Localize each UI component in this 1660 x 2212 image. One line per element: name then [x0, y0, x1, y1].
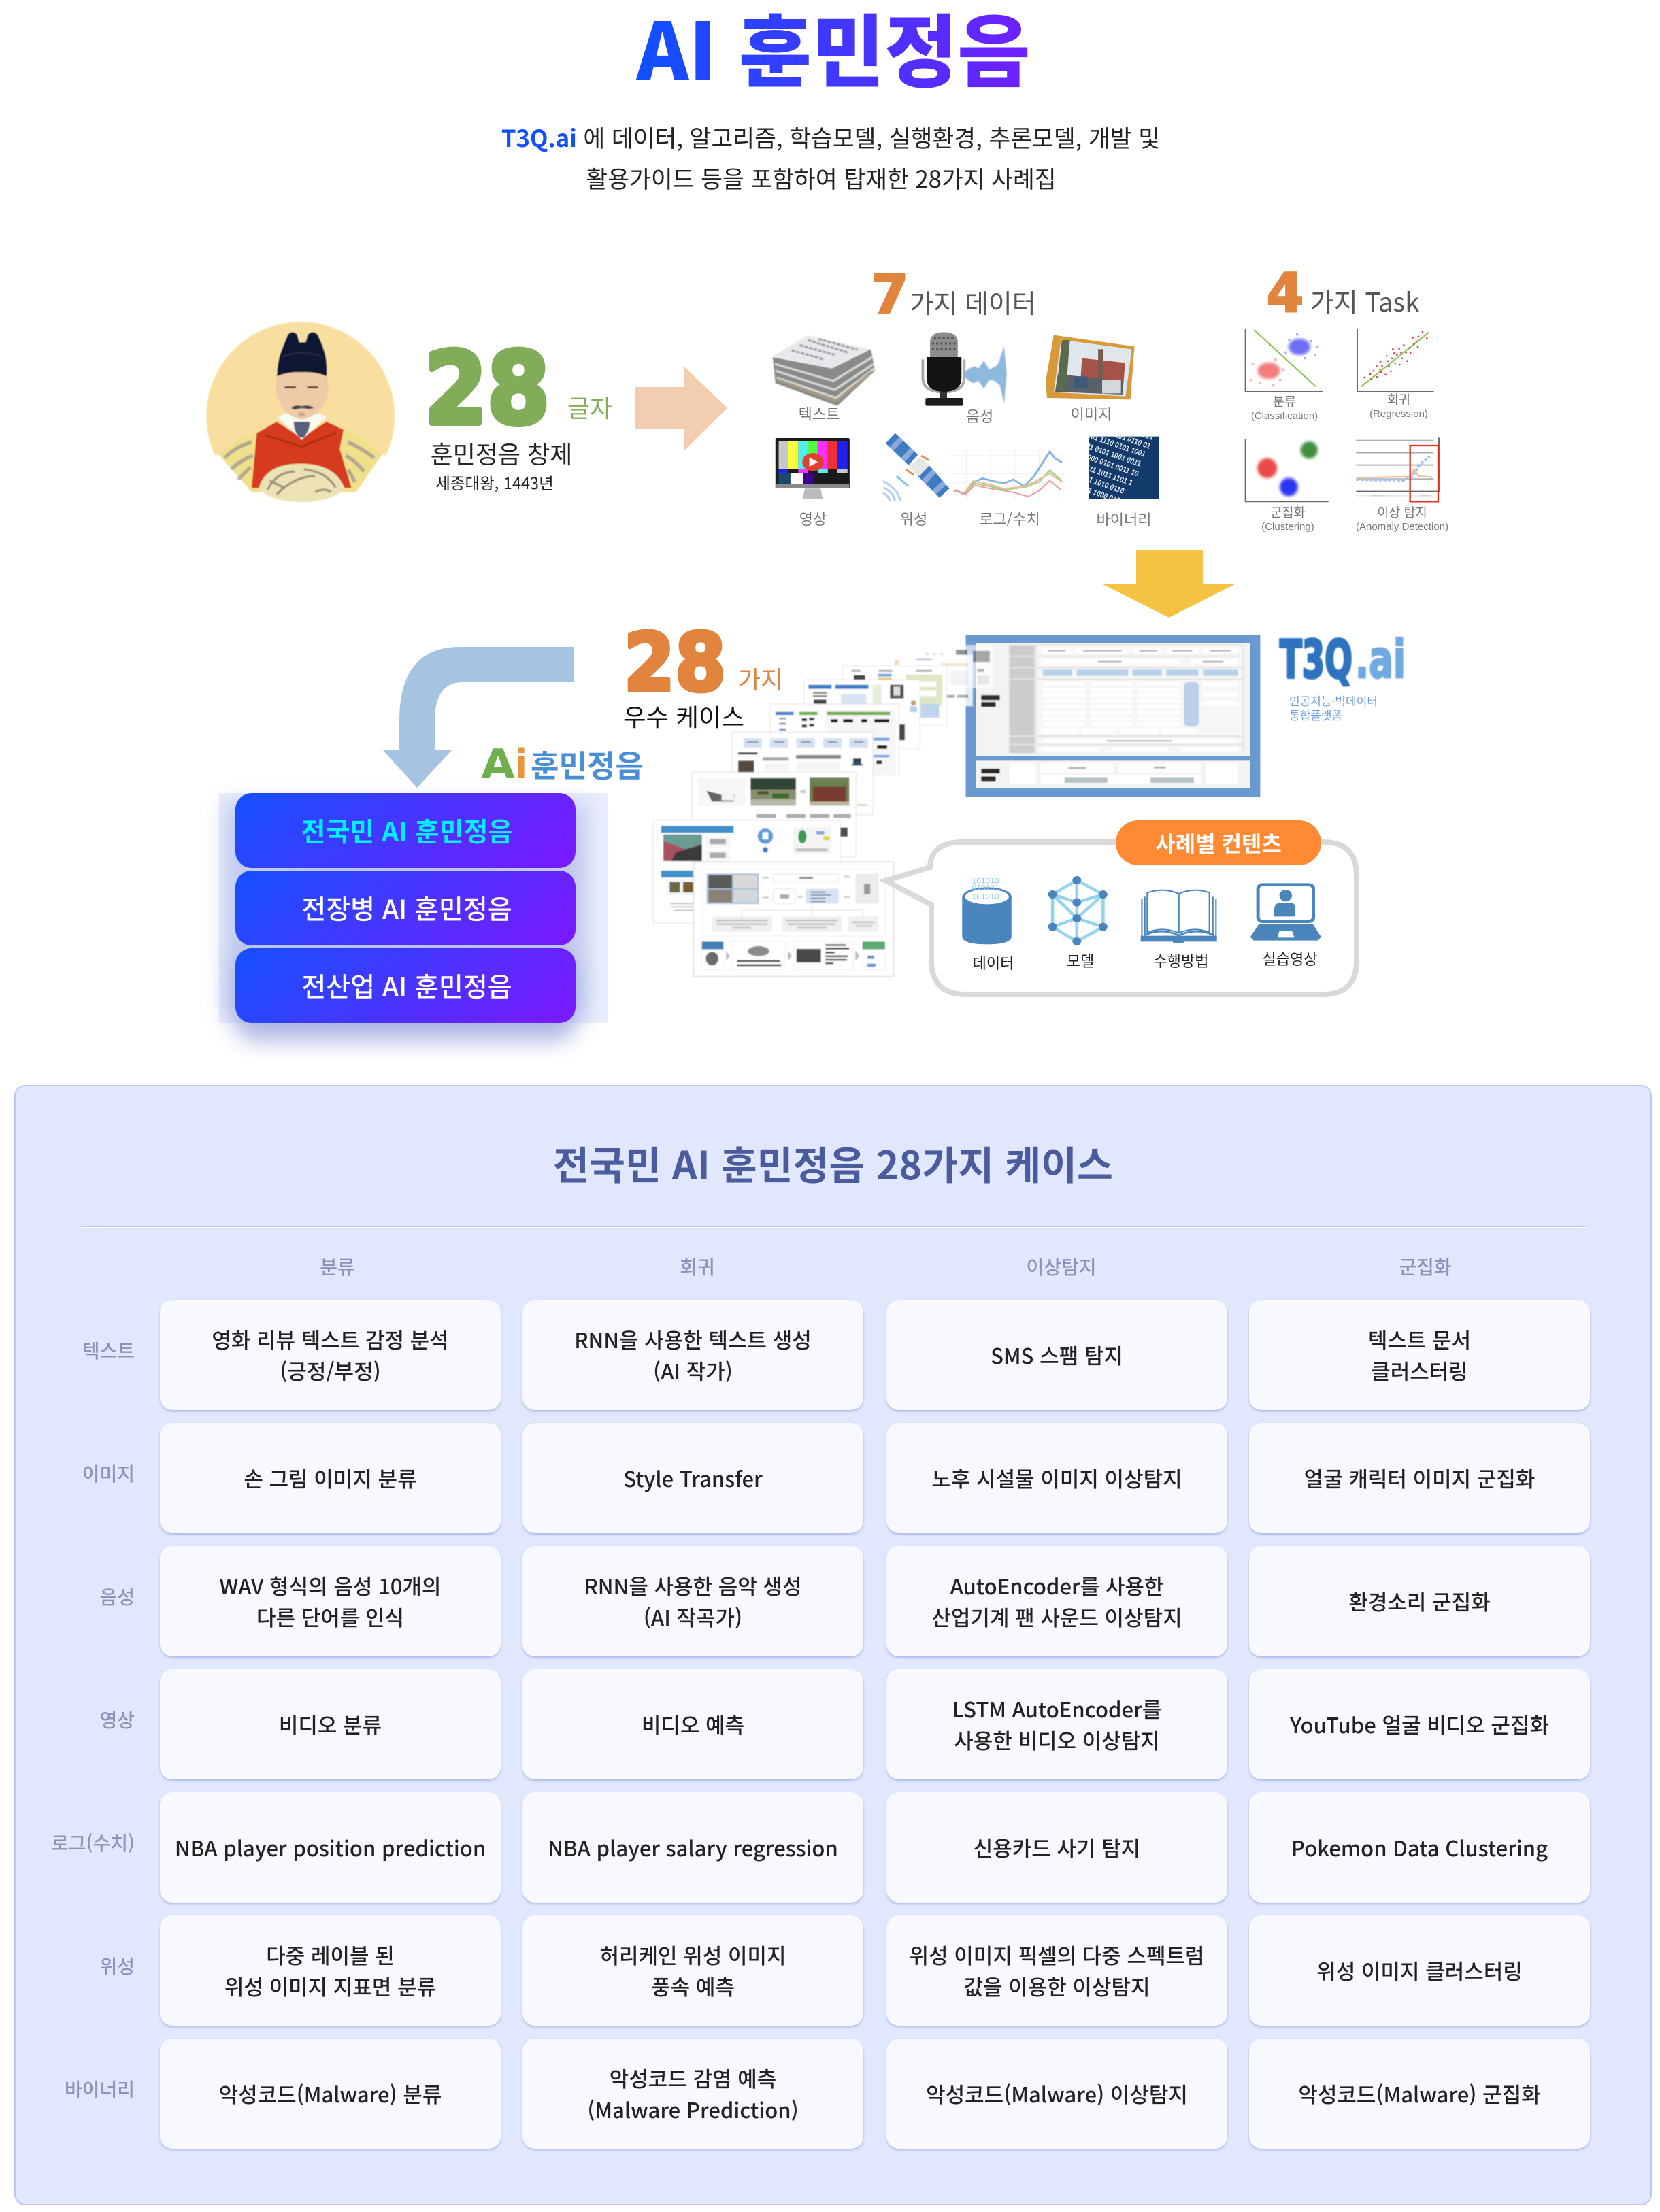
subtitle: 활용가이드 등을 포함하여 탑재한 28가지 사례집 — [586, 161, 1057, 195]
row label: text: 텍스트 — [82, 1337, 135, 1364]
label: clustering: 군집화 — [1270, 503, 1306, 521]
column header: regression: 회귀 — [680, 1253, 715, 1280]
column header: classification: 분류 — [320, 1253, 355, 1280]
card — [522, 1423, 863, 1533]
media type icons — [773, 332, 1159, 507]
icon: binary: 11 1011 1101 0110 01 — [1086, 422, 1152, 451]
logo: T3Q.ai: T3Q — [1280, 630, 1352, 690]
card: 산업기계 팬 사운드 이상탐지 — [931, 1601, 1182, 1632]
badge: contents by case — [1116, 820, 1321, 865]
logo: AI Hunminjeongeum — [481, 741, 644, 788]
icon: newspapers text — [773, 335, 875, 406]
logo tagline: 인공지능·빅데이터 — [1289, 692, 1378, 709]
card: 값을 이용한 이상탐지 — [963, 1971, 1150, 2001]
sheet 7 — [842, 665, 947, 726]
card: 다중 레이블 된 — [266, 1939, 395, 1970]
card — [522, 1546, 863, 1656]
label: text: 텍스트 — [799, 403, 840, 424]
task charts — [1246, 329, 1439, 501]
card — [886, 1915, 1227, 2026]
panel heading: 전국민 AI 훈민정음 28가지 케이스 — [553, 1134, 1113, 1191]
label: cases unit: 가지 — [738, 660, 783, 696]
panel: 28 cases — [14, 1085, 1652, 2205]
sheet 3 — [692, 773, 856, 857]
label: audio: 음성 — [966, 405, 993, 426]
button: AI for soldiers — [235, 871, 576, 945]
card: 환경소리 군집화 — [1348, 1586, 1491, 1616]
callout icons — [962, 876, 1321, 945]
card — [886, 2039, 1227, 2149]
badge: contents by case: 사례별 컨텐츠 — [1155, 827, 1282, 858]
sheet 2 — [654, 820, 840, 924]
label: data: 데이터 — [973, 952, 1014, 973]
card — [886, 1546, 1227, 1656]
label: classification: 분류 — [1273, 392, 1296, 410]
column header: clustering: 군집화 — [1399, 1253, 1452, 1280]
icon: database: 101010 — [972, 892, 999, 901]
arrow: blue curved down-left — [383, 647, 574, 788]
card — [160, 2039, 501, 2149]
card — [1249, 1546, 1590, 1656]
logo: T3Q.ai: .ai — [1355, 630, 1406, 690]
sheet 4 — [733, 733, 873, 815]
icon: database: 101010 — [972, 877, 999, 885]
card — [160, 1915, 501, 2026]
card — [160, 1792, 501, 1903]
button: AI for all industries: 전산업 AI 훈민정음 — [301, 967, 512, 1005]
card — [160, 1546, 501, 1656]
card: 풍속 예측 — [651, 1971, 735, 2001]
icon: binary: 1010 1001 1110 0101 — [1090, 414, 1155, 442]
heading: 4 tasks: 4 — [1267, 263, 1304, 324]
card — [522, 1300, 863, 1410]
row label: video: 영상 — [99, 1706, 135, 1733]
label: method: 수행방법 — [1154, 950, 1208, 971]
logo tagline — [1289, 692, 1378, 723]
heading: 4 tasks — [1267, 263, 1419, 324]
number: 28 letters: 28 — [425, 331, 550, 447]
card — [1249, 1792, 1590, 1903]
chart: clustering scatter — [1246, 439, 1329, 501]
label: image: 이미지 — [1071, 403, 1112, 424]
card: 악성코드(Malware) 군집화 — [1298, 2078, 1541, 2109]
card: 손 그림 이미지 분류 — [244, 1462, 417, 1493]
subtitle — [501, 120, 1160, 195]
sheet 1 — [693, 862, 893, 977]
heading: excellent cases: 우수 케이스 — [623, 698, 744, 734]
card: 위성 이미지 지표면 분류 — [225, 1971, 436, 2001]
icon: binary: 0001 1110 0101 1001 — [1082, 430, 1147, 459]
card: Style Transfer — [623, 1462, 763, 1493]
icon: binary — [1089, 437, 1159, 499]
icon: photo image — [1046, 335, 1134, 399]
callout: contents by case — [886, 820, 1357, 994]
button: AI for all citizens: 전국민 AI 훈민정음 — [301, 811, 512, 850]
card: 악성코드(Malware) 분류 — [219, 2078, 442, 2109]
card: 비디오 예측 — [642, 1709, 744, 1739]
case sheet stack — [654, 645, 993, 977]
heading: 7 data types — [872, 265, 1036, 326]
icon: binary: 101 0101 1010 0110 — [1064, 468, 1126, 496]
card — [886, 1792, 1227, 1903]
card: 비디오 분류 — [279, 1709, 382, 1739]
label: regression: 회귀 — [1387, 390, 1410, 408]
logo: AI Hunminjeongeum: 훈민정음 — [531, 741, 644, 786]
arrow: peach right — [635, 367, 727, 450]
logo tagline: 통합플랫폼 — [1289, 706, 1342, 723]
icon: binary: 1101 0101 1001 0011 — [1078, 439, 1142, 469]
card: 노후 시설물 이미지 이상탐지 — [931, 1462, 1182, 1493]
card: WAV 형식의 음성 10개의 — [220, 1570, 441, 1601]
platform architecture diagram — [966, 635, 1260, 797]
icon: video monitor — [776, 438, 850, 499]
card: YouTube 얼굴 비디오 군집화 — [1290, 1709, 1549, 1739]
heading: Hunminjeongeum creation: 훈민정음 창제 — [431, 435, 572, 471]
sheet 8 — [884, 655, 973, 706]
card: 얼굴 캐릭터 이미지 군집화 — [1304, 1462, 1535, 1493]
card: (긍정/부정) — [280, 1355, 381, 1386]
icon: binary: 101 1111 1011 1101 1 — [1069, 458, 1134, 488]
row label: audio: 음성 — [99, 1583, 135, 1610]
card — [1249, 1423, 1590, 1533]
card: (Malware Prediction) — [587, 2094, 799, 2124]
card — [522, 1915, 863, 2026]
icon: microphone audio — [923, 332, 1007, 406]
card — [886, 1669, 1227, 1779]
card: NBA player position prediction — [175, 1832, 486, 1862]
icon: log line chart — [948, 449, 1066, 500]
card: 영화 리뷰 텍스트 감정 분석 — [212, 1324, 449, 1354]
label: model: 모델 — [1067, 950, 1094, 971]
label: video: 영상 — [799, 507, 827, 529]
row label: satellite: 위성 — [99, 1952, 135, 1979]
card — [1249, 1669, 1590, 1779]
heading: 7 data types: 가지 데이터 — [910, 283, 1036, 320]
sheet 9 — [917, 645, 993, 688]
card: 허리케인 위성 이미지 — [599, 1939, 786, 1970]
card: SMS 스팸 탐지 — [991, 1339, 1123, 1370]
infographic flow diagram — [205, 0, 1448, 1054]
card — [522, 2039, 863, 2149]
card: 클러스터링 — [1371, 1355, 1468, 1386]
label: Anomaly Detection english: (Anomaly Detection) — [1356, 521, 1448, 533]
card — [522, 1792, 863, 1903]
label: Regression english: (Regression) — [1370, 408, 1428, 420]
card — [1249, 2039, 1590, 2149]
card: 텍스트 문서 — [1368, 1324, 1471, 1354]
button: AI for all citizens — [235, 793, 576, 868]
card — [160, 1423, 501, 1533]
card: LSTM AutoEncoder를 — [952, 1693, 1161, 1724]
card: 위성 이미지 클러스터링 — [1316, 1955, 1523, 1985]
card: 사용한 비디오 이상탐지 — [954, 1724, 1160, 1755]
column header: anomaly detection: 이상탐지 — [1026, 1253, 1097, 1280]
icon: database — [962, 877, 1012, 944]
subtitle: T3Q.ai 에 데이터, 알고리즘, 학습모델, 실행환경, 추론모델, 개발 및 — [501, 120, 1160, 154]
icon: database: 010101 — [972, 884, 999, 892]
heading: 4 tasks: 가지 Task — [1310, 282, 1419, 319]
row label: log: 로그(수치) — [51, 1829, 135, 1856]
card: 다른 단어를 인식 — [256, 1601, 404, 1632]
card: AutoEncoder를 사용한 — [950, 1570, 1163, 1601]
label: letters: 글자 — [567, 389, 612, 424]
label: satellite: 위성 — [900, 507, 927, 529]
card: (AI 작가) — [653, 1355, 733, 1386]
chart: classification scatter — [1246, 329, 1323, 392]
caption: King Sejong 1443: 세종대왕, 1443년 — [435, 471, 554, 494]
label: Classification english: (Classification) — [1251, 410, 1318, 422]
logo: AI Hunminjeongeum: i — [515, 741, 527, 788]
button backdrop and shadow — [219, 793, 608, 1041]
chart: regression scatter — [1357, 329, 1434, 392]
icon: binary: 10 1000 0101 0011 10 — [1073, 449, 1140, 479]
chart: anomaly detection — [1356, 437, 1439, 501]
card — [160, 1669, 501, 1779]
label: anomaly: 이상 탐지 — [1377, 503, 1427, 521]
card — [522, 1669, 863, 1779]
card: 신용카드 사기 탐지 — [974, 1832, 1140, 1862]
card: NBA player salary regression — [548, 1832, 838, 1862]
sheet 5 — [771, 704, 899, 775]
icon: binary: 0001 0101 1000 0101 — [1059, 477, 1125, 507]
card — [160, 1300, 501, 1410]
button: AI for soldiers: 전장병 AI 훈민정음 — [301, 889, 512, 927]
logo: AI Hunminjeongeum: A — [481, 741, 516, 788]
portrait: King Sejong — [205, 321, 395, 503]
sheet 6 — [804, 680, 920, 748]
card: (AI 작곡가) — [644, 1601, 742, 1632]
row label: image: 이미지 — [82, 1460, 135, 1487]
icon: model network — [1048, 876, 1108, 945]
card — [1249, 1300, 1590, 1410]
number: 28 cases: 28 — [624, 616, 726, 709]
icon: satellite — [883, 433, 950, 501]
card — [1249, 1915, 1590, 2026]
heading: 7 data types: 7 — [872, 265, 908, 326]
row label: binary: 바이너리 — [65, 2075, 135, 2102]
card: RNN을 사용한 음악 생성 — [584, 1570, 802, 1601]
label: Clustering english: (Clustering) — [1261, 521, 1314, 533]
icon: video lesson laptop — [1250, 885, 1321, 941]
label: log/numeric: 로그/수치 — [979, 507, 1040, 529]
button: AI for all industries — [235, 948, 576, 1023]
icon: open book — [1142, 890, 1216, 943]
arrow: yellow down — [1103, 550, 1235, 618]
card: RNN을 사용한 텍스트 생성 — [574, 1324, 812, 1354]
card — [886, 1423, 1227, 1533]
card: Pokemon Data Clustering — [1291, 1832, 1548, 1862]
card: 악성코드 감염 예측 — [610, 2062, 776, 2093]
card: 악성코드(Malware) 이상탐지 — [926, 2078, 1188, 2109]
label: binary: 바이너리 — [1097, 508, 1151, 530]
label: practice video: 실습영상 — [1263, 948, 1317, 969]
card: 위성 이미지 픽셀의 다중 스펙트럼 — [909, 1939, 1204, 1970]
card — [886, 1300, 1227, 1410]
